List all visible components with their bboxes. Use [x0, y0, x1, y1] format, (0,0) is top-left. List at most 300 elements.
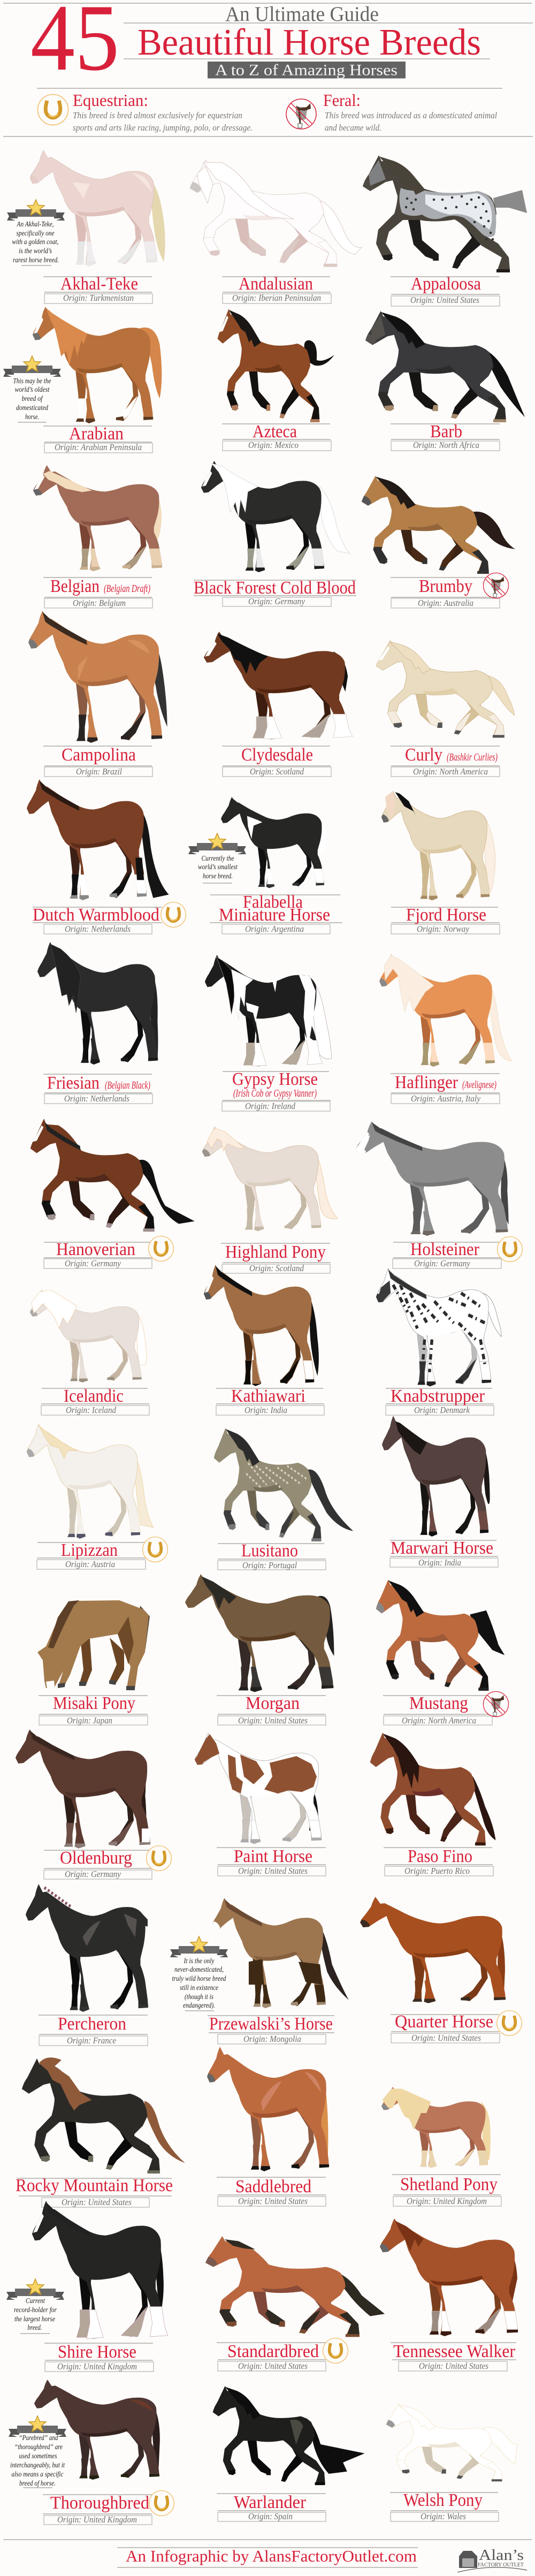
name: Paso Fino — [408, 1846, 472, 1866]
alternate name: (Bashkir Curlies) — [447, 751, 498, 763]
origin: Origin: Scotland — [250, 766, 304, 777]
callout text — [13, 377, 51, 421]
callout text: (though it is — [185, 1993, 213, 2001]
callout text: the largest horse — [14, 2315, 55, 2323]
horse: Arabian — [33, 307, 162, 423]
origin: Origin: Iceland — [66, 1405, 116, 1415]
callout text: never-domesticated, — [174, 1966, 224, 1974]
callout: smallest — [188, 833, 246, 880]
horse: Holsteiner — [356, 1121, 509, 1236]
card: Black Forest Cold Blood — [194, 461, 356, 606]
callout: rarest — [7, 200, 65, 264]
name: Quarter Horse — [395, 2012, 493, 2032]
name: Fjord Horse — [406, 905, 486, 925]
origin: Origin: Wales — [421, 2511, 466, 2521]
origin: Origin: Netherlands — [64, 1093, 129, 1104]
origin — [222, 1263, 330, 1273]
callout text: still in existence — [180, 1984, 218, 1992]
horse: Thoroughbred — [34, 2380, 160, 2480]
callout: purebred — [9, 2416, 66, 2488]
card: Lipizzan — [27, 1424, 167, 1569]
origin — [223, 596, 331, 606]
callout text: “thoroughbred” are — [14, 2443, 63, 2451]
name: Campolina — [62, 745, 136, 765]
horse: Saddlebred — [207, 2047, 329, 2171]
icon: feral — [483, 1691, 509, 1717]
origin: Origin: Japan — [67, 1715, 112, 1726]
horse: Friesian — [37, 942, 158, 1065]
origin — [223, 766, 331, 777]
callout text: breed of horse. — [19, 2480, 56, 2488]
origin — [44, 1258, 152, 1268]
horse: Tennessee Walker — [380, 2218, 518, 2336]
callout text: horse. — [25, 413, 39, 421]
origin: Origin: Netherlands — [65, 924, 131, 934]
badge — [3, 356, 61, 377]
origin — [218, 2034, 326, 2044]
horse: Highland Pony — [202, 1127, 338, 1231]
callout text: specifically one — [16, 230, 55, 238]
card: Friesian — [37, 942, 158, 1104]
callout text: is the world’s — [19, 247, 52, 255]
subtitle: An Ultimate Guide: An Ultimate Guide — [225, 3, 379, 26]
origin — [391, 440, 500, 451]
horse: Knabstrupper — [376, 1268, 501, 1386]
name: Gypsy Horse — [232, 1069, 318, 1089]
origin: Origin: North America — [402, 1715, 476, 1726]
origin: Origin: Mongolia — [243, 2034, 301, 2044]
name: Kathiawari — [231, 1386, 305, 1406]
origin: Origin: Brazil — [76, 766, 122, 777]
origin: Origin: Australia — [418, 598, 473, 608]
origin — [390, 1557, 498, 1568]
origin: Origin: North America — [413, 766, 488, 777]
icon: equestrian — [161, 902, 186, 927]
horse: Warlander — [213, 2386, 365, 2485]
card: Akhal-Teke — [7, 150, 165, 303]
horse: Akhal-Teke — [30, 150, 165, 266]
origin: Origin: United States — [410, 295, 479, 305]
card: Belgian — [33, 465, 162, 608]
card: Warlander — [213, 2386, 365, 2521]
footer credit: An Infographic by AlansFactoryOutlet.com — [126, 2547, 417, 2565]
origin — [44, 924, 152, 934]
card: Lusitano — [214, 1428, 353, 1570]
card: Misaki Pony — [37, 1600, 150, 1726]
name: Welsh Pony — [403, 2490, 483, 2510]
name — [50, 576, 150, 596]
horse: Paint Horse — [195, 1733, 322, 1844]
horse: Shetland Pony — [381, 2087, 491, 2168]
horse: Haflinger — [379, 954, 512, 1067]
horse: Hanoverian — [30, 1119, 195, 1232]
card: Shetland Pony — [381, 2087, 501, 2206]
logo: Alan's Factory Outlet — [457, 2547, 527, 2572]
name: Belgian — [50, 576, 100, 596]
origin: Origin: North Africa — [413, 440, 479, 450]
origin: Origin: Turkmenistan — [63, 293, 134, 303]
name: Clydesdale — [241, 745, 313, 765]
origin — [218, 1560, 326, 1570]
legend: equestrian — [37, 90, 253, 133]
icon: barn — [459, 2551, 477, 2568]
origin: Origin: United States — [238, 2361, 308, 2371]
name: Arabian — [69, 424, 124, 444]
horse: Curly — [376, 641, 515, 738]
origin: Origin: Germany — [248, 596, 305, 606]
origin — [386, 1405, 494, 1415]
name: Standardbred — [227, 2342, 319, 2361]
name: Knabstrupper — [391, 1386, 485, 1406]
name: Barb — [430, 422, 462, 442]
card: Standardbred — [205, 2236, 385, 2371]
callout text: This may be the — [13, 377, 51, 385]
alternate name: (Belgian Black) — [105, 1080, 150, 1091]
origin — [41, 1405, 149, 1415]
horse: Black Forest Cold Blood — [201, 461, 350, 572]
legend text — [73, 110, 253, 133]
horse: Fjord Horse — [381, 791, 495, 900]
card: Quarter Horse — [360, 1897, 522, 2043]
name: Black Forest Cold Blood — [194, 578, 356, 598]
legend text: sports and arts like racing, jumping, polo, or dressage. — [73, 123, 253, 133]
callout text: record-holder for — [14, 2306, 57, 2314]
name: Tennessee Walker — [393, 2342, 516, 2361]
horse: Mustang — [376, 1579, 505, 1691]
card: Shire Horse — [6, 2201, 168, 2372]
horse: Paso Fino — [370, 1732, 495, 1845]
callout text: breed of — [21, 395, 43, 403]
origin — [391, 295, 500, 306]
card: Arabian — [3, 307, 162, 453]
horse: Lusitano — [214, 1428, 353, 1541]
origin — [44, 598, 152, 608]
callout: largest — [6, 2279, 64, 2332]
origin: Origin: Germany — [65, 1258, 121, 1268]
name: Holsteiner — [410, 1240, 480, 1259]
horse: Belgian — [33, 465, 162, 571]
horse: Shire Horse — [32, 2201, 168, 2339]
icon: equestrian — [498, 1237, 522, 1262]
callout text — [14, 2297, 57, 2332]
origin — [385, 1866, 493, 1876]
name: Brumby — [419, 576, 472, 596]
card: Curly — [376, 641, 515, 777]
name: Highland Pony — [225, 1242, 326, 1262]
origin: Origin: Ireland — [245, 1101, 295, 1111]
card: Paso Fino — [370, 1732, 495, 1876]
name: Misaki Pony — [53, 1693, 135, 1713]
horse: Quarter Horse — [360, 1897, 506, 2003]
card: Saddlebred — [207, 2047, 329, 2206]
card: Andalusian — [190, 160, 362, 303]
card: Rocky Mountain Horse — [16, 2057, 185, 2207]
horse: Lipizzan — [27, 1424, 154, 1539]
card: Falabella — [188, 797, 342, 934]
name: Hanoverian — [56, 1240, 135, 1259]
name — [405, 745, 498, 765]
name: Przewalski’s Horse — [209, 2014, 333, 2034]
title block — [30, 0, 533, 90]
horse: Falabella Miniature Horse — [221, 797, 326, 888]
horse: Barb — [365, 311, 525, 422]
horse: Andalusian — [190, 160, 362, 267]
icon: equestrian — [143, 1537, 167, 1562]
callout text: world’s oldest — [15, 386, 50, 394]
horse: Appaloosa — [363, 155, 527, 272]
name: Thoroughbred — [50, 2493, 149, 2513]
icon: no saddle — [286, 99, 316, 129]
card: Kathiawari — [204, 1265, 324, 1415]
origin: Origin: Mexico — [248, 440, 299, 450]
origin — [391, 924, 500, 934]
card: Gypsy Horse — [205, 955, 332, 1111]
origin — [37, 1559, 146, 1569]
origin — [393, 1258, 501, 1268]
origin — [222, 1101, 330, 1111]
origin — [44, 1869, 152, 1879]
origin — [39, 1715, 148, 1726]
origin — [44, 293, 152, 303]
callout text: An Akhal-Teke, — [17, 221, 54, 229]
card: Mustang — [376, 1579, 509, 1726]
card: Przewalski's Horse — [170, 1898, 349, 2044]
name — [395, 1073, 496, 1092]
origin: Origin: Germany — [414, 1258, 470, 1268]
callout text — [198, 855, 238, 880]
card: Barb — [365, 311, 525, 451]
callout text: Current — [26, 2297, 45, 2305]
card: Hanoverian — [30, 1119, 195, 1268]
origin: Origin: United Kingdom — [57, 2361, 137, 2372]
name: Shire Horse — [58, 2342, 136, 2362]
icon: equestrian — [147, 1846, 171, 1871]
origin: Origin: Germany — [65, 1869, 121, 1879]
origin: Origin: Iberian Peninsulan — [232, 293, 321, 303]
origin — [44, 1093, 152, 1104]
legend text: This breed was introduced as a domesticated animal — [325, 110, 497, 120]
card: Highland Pony — [202, 1127, 338, 1273]
name: Icelandic — [64, 1386, 124, 1406]
name: Morgan — [246, 1693, 300, 1713]
horse: Kathiawari — [204, 1265, 319, 1386]
legend text: and became wild. — [325, 123, 381, 133]
origin: Origin: United Kingdom — [407, 2196, 487, 2206]
horse: Percheron — [26, 1884, 148, 2012]
origin: Origin: Denmark — [414, 1405, 470, 1415]
origin: Origin: Spain — [248, 2511, 293, 2521]
name — [47, 1073, 150, 1093]
card: Welsh Pony — [386, 2404, 518, 2521]
legend: feral — [286, 90, 497, 133]
name: Lipizzan — [61, 1540, 118, 1560]
name — [219, 892, 330, 925]
name: Akhal-Teke — [60, 274, 138, 294]
badge — [7, 200, 65, 221]
card: Brumby — [362, 476, 515, 608]
legend heading: Equestrian: — [73, 90, 148, 110]
name — [232, 1069, 318, 1099]
horse: Clydesdale — [204, 632, 353, 740]
origin: Origin: United States — [411, 2033, 481, 2043]
horse: Brumby — [362, 476, 515, 574]
callout text: breed. — [28, 2324, 42, 2332]
card: Clydesdale — [204, 632, 353, 777]
card: Campolina — [28, 611, 167, 777]
origin: Origin: Norway — [417, 924, 469, 934]
callout: oldest — [3, 356, 61, 421]
callout text: world’s smallest — [198, 863, 238, 871]
callout text — [12, 221, 59, 264]
name: Marwari Horse — [391, 1538, 493, 1558]
card: Morgan — [185, 1574, 334, 1726]
card: Appaloosa — [363, 155, 527, 306]
badge — [6, 2279, 64, 2300]
callout text: truly wild horse breed — [172, 1975, 226, 1983]
horse: Azteca — [218, 309, 334, 422]
callout text: used sometimes — [19, 2452, 57, 2460]
origin: Origin: Austria — [65, 1559, 115, 1569]
card: Percheron — [26, 1884, 148, 2046]
card: Dutch Warmblood — [27, 779, 186, 934]
legend text: This breed is bred almost exclusively for equestrian — [73, 110, 242, 120]
name: Andalusian — [239, 274, 313, 294]
callout text — [10, 2434, 65, 2488]
horse: Standardbred — [205, 2236, 385, 2337]
callout text: also means a specific — [12, 2471, 64, 2479]
name: Oldenburg — [60, 1848, 132, 1868]
horse: Gypsy Horse — [205, 955, 332, 1067]
origin: Origin: United Kingdom — [57, 2514, 137, 2525]
card: Azteca — [218, 309, 334, 451]
origin: Origin: United States — [419, 2361, 488, 2371]
name: Warlander — [234, 2493, 307, 2512]
origin: Origin: United States — [238, 1866, 308, 1876]
name: Paint Horse — [234, 1846, 312, 1866]
callout text: Currently the — [201, 855, 234, 863]
origin: Origin: Belgium — [73, 598, 126, 608]
name: Azteca — [253, 422, 297, 442]
main title: Beautiful Horse Breeds — [137, 22, 481, 63]
origin — [223, 440, 331, 451]
origin — [44, 766, 152, 777]
origin: Origin: United States — [238, 1715, 308, 1726]
horse: Icelandic — [30, 1290, 147, 1382]
card: Fjord Horse — [381, 791, 500, 934]
card: Haflinger — [379, 954, 512, 1104]
name: Appaloosa — [411, 274, 481, 294]
callout text: with a golden coat, — [12, 238, 59, 246]
icon: equestrian — [149, 2491, 174, 2516]
origin — [391, 598, 500, 608]
icon: equestrian — [323, 2338, 348, 2363]
horse: Campolina — [28, 611, 167, 743]
name: Haflinger — [395, 1073, 458, 1092]
callout text: interchangeably, but it — [10, 2461, 65, 2469]
name: Falabella — [243, 892, 303, 912]
icon: horseshoe — [37, 94, 68, 125]
horse: Morgan — [185, 1574, 334, 1692]
alternate name: (Belgian Draft) — [104, 583, 150, 595]
origin: Origin: India — [244, 1405, 287, 1415]
name: Shetland Pony — [400, 2175, 498, 2194]
origin — [39, 2035, 148, 2046]
name: Mustang — [409, 1693, 468, 1713]
name: Percheron — [58, 2014, 126, 2034]
badge — [9, 2416, 66, 2437]
card: Tennessee Walker — [380, 2218, 518, 2371]
callout text: domesticated — [16, 404, 49, 412]
origin: Origin: Scotland — [249, 1263, 304, 1273]
callout: wild — [170, 1936, 228, 2010]
alternate name: (Irish Cob or Gypsy Vanner) — [233, 1088, 317, 1099]
origin — [222, 924, 330, 934]
banner: A to Z: A to Z of Amazing Horses — [215, 61, 398, 79]
icon: equestrian — [149, 1236, 173, 1261]
callout text: endangered). — [183, 2002, 215, 2010]
card: Knabstrupper — [376, 1268, 501, 1415]
icon: equestrian — [497, 2011, 522, 2035]
card: Oldenburg — [16, 1729, 171, 1879]
callout text: horse breed. — [203, 872, 233, 880]
card: Icelandic — [30, 1290, 149, 1415]
name: Saddlebred — [235, 2177, 311, 2197]
legend heading: Feral: — [323, 90, 361, 110]
name: Miniature Horse — [219, 905, 330, 925]
origin: Origin: France — [67, 2035, 116, 2046]
origin: Origin: United States — [62, 2197, 132, 2207]
legend text — [325, 110, 497, 133]
origin: Origin: Portugal — [242, 1560, 297, 1570]
callout text: It is the only — [184, 1957, 215, 1965]
callout text: rarest horse breed. — [13, 256, 59, 264]
horse: Misaki Pony — [37, 1600, 150, 1690]
origin: Origin: United States — [238, 2196, 308, 2206]
name: Lusitano — [241, 1541, 298, 1561]
name: Dutch Warmblood — [33, 905, 159, 925]
horse: Oldenburg — [16, 1729, 150, 1848]
callout text: “Purebred” and — [19, 2434, 58, 2442]
horse: Przewalski's Horse — [212, 1898, 349, 2008]
origin — [218, 2511, 326, 2521]
origin: Origin: Arabian Peninsula — [55, 442, 142, 452]
name: Rocky Mountain Horse — [16, 2176, 173, 2195]
card: Paint Horse — [195, 1733, 326, 1876]
badge — [170, 1936, 228, 1957]
icon: feral — [483, 573, 509, 598]
card: Thoroughbred — [9, 2380, 174, 2525]
card: Marwari Horse — [382, 1416, 498, 1568]
origin — [216, 1405, 324, 1415]
card: Holsteiner — [356, 1121, 522, 1268]
origin — [391, 2511, 499, 2521]
origin: Origin: Argentina — [245, 924, 304, 934]
origin: Origin: Puerto Rico — [404, 1866, 470, 1876]
badge — [188, 833, 246, 854]
origin: Origin: India — [418, 1557, 461, 1568]
horse: Marwari Horse — [382, 1416, 490, 1537]
alternate name: (Avelignese) — [462, 1079, 496, 1091]
callout text — [172, 1957, 226, 2010]
name: Curly — [405, 745, 442, 765]
origin: Origin: Austria, Italy — [411, 1093, 480, 1104]
horse: Dutch Warmblood — [27, 779, 169, 900]
name: Friesian — [47, 1073, 100, 1093]
logo: Alan's Factory Outlet: FACTORY OUTLET — [478, 2562, 524, 2568]
logo: Alan's Factory Outlet: Alan’s — [479, 2547, 524, 2564]
horse: Rocky Mountain Horse — [22, 2057, 185, 2174]
horse: Welsh Pony — [386, 2404, 518, 2481]
